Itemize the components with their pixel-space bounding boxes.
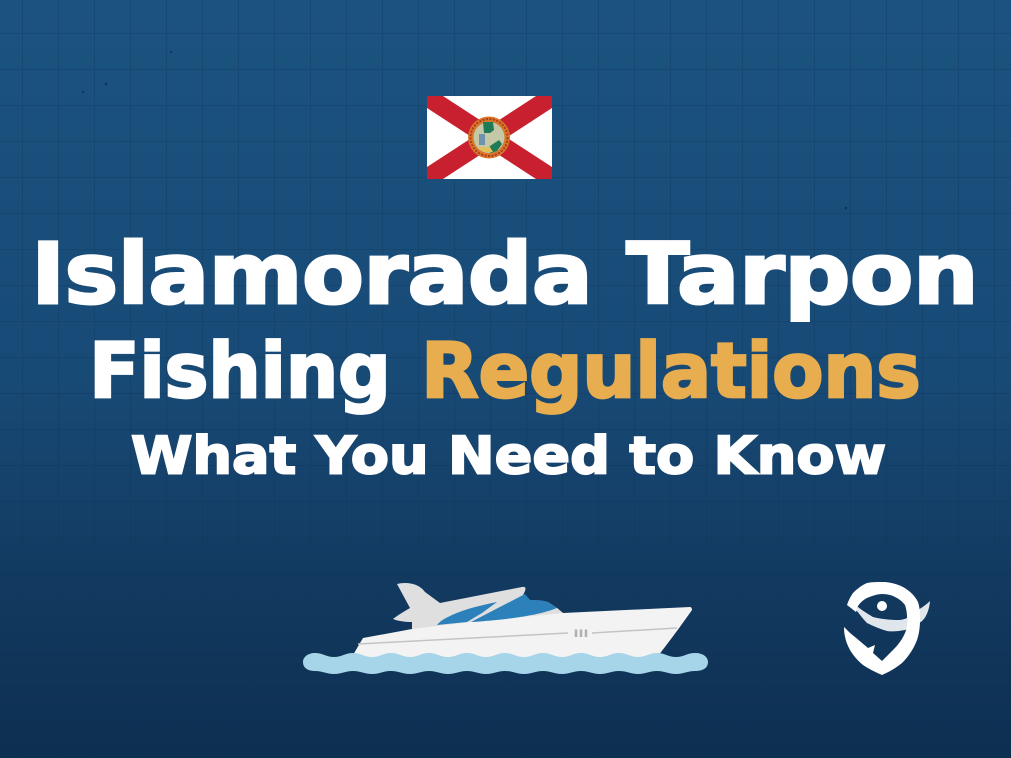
heading: Fishing Regulations: Fishing: [89, 326, 391, 415]
icon: boat on waves: [303, 583, 708, 674]
heading: Fishing Regulations: [89, 326, 921, 415]
icon: fish hook logo: [844, 582, 930, 675]
title: Islamorada Tarpon: [32, 225, 978, 323]
icon: Florida flag: [427, 96, 552, 179]
title: Islamorada Tarpon: Tarpon: [626, 225, 978, 323]
subtitle: What You Need to Know: What You Need to Know: [131, 426, 886, 486]
heading: Fishing Regulations: Regulations: [421, 326, 921, 415]
title: Islamorada Tarpon: Islamorada: [32, 225, 592, 323]
